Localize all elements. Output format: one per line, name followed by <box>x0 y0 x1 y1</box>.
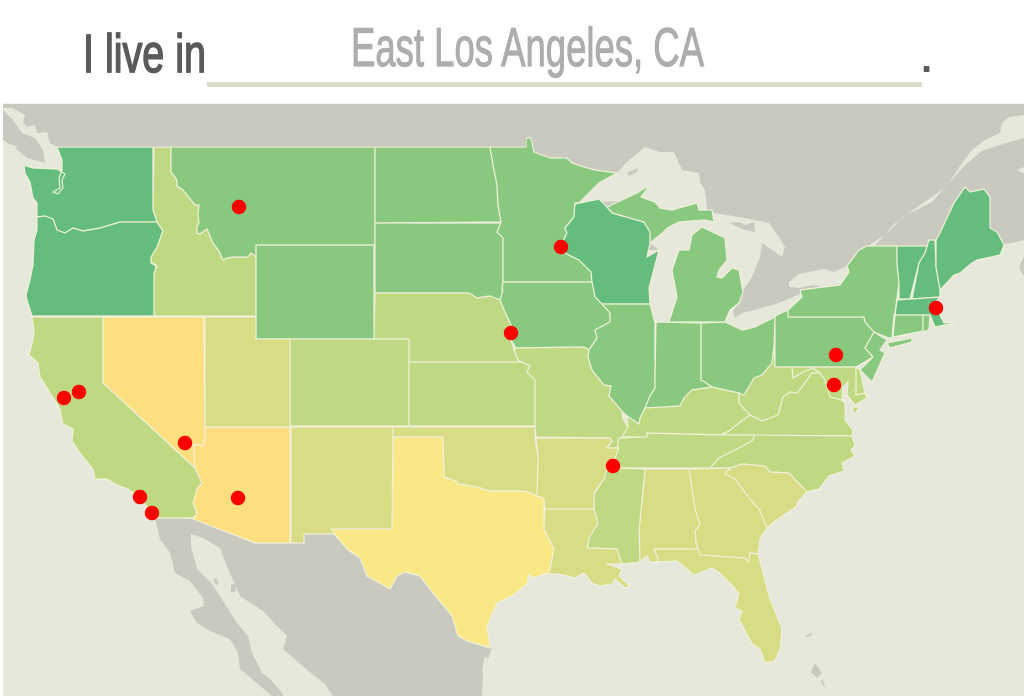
state: Minnesota <box>490 138 617 282</box>
state: Rhode Island <box>923 315 930 332</box>
state: Pennsylvania <box>775 310 874 367</box>
state: Virginia eastern shore <box>853 407 860 415</box>
state: West Virginia <box>739 347 820 421</box>
state: Vermont <box>897 246 927 299</box>
state: Wisconsin <box>560 199 659 304</box>
state: Massachusetts <box>895 297 955 327</box>
Gulf of St. Lawrence notch <box>1017 167 1024 174</box>
states choropleth <box>24 138 1004 663</box>
state: Maryland <box>792 367 867 405</box>
dot: Pennsylvania <box>829 348 843 362</box>
state: New York <box>788 246 899 338</box>
dot: Oakland <box>72 385 86 399</box>
state: Long Island <box>887 338 912 348</box>
state: Colorado <box>290 339 409 426</box>
Great Lakes: Superior, Michigan, Huron <box>579 147 785 325</box>
state: California <box>29 317 202 518</box>
state: South Carolina <box>725 464 807 528</box>
state: New Jersey <box>860 332 887 382</box>
state: Arizona <box>193 427 290 543</box>
state: Virginia <box>722 373 853 436</box>
state: Wyoming <box>256 245 374 339</box>
dot: Montana <box>232 200 246 214</box>
Bahamas <box>805 633 825 688</box>
state: Arkansas <box>536 438 619 509</box>
dot: Arizona <box>231 491 245 505</box>
markers: red location dots <box>57 200 943 520</box>
state: Illinois <box>588 304 655 424</box>
state: Indiana <box>645 322 712 408</box>
state: Utah <box>205 317 290 427</box>
state: Maine <box>936 187 1004 290</box>
dot: Massachusetts <box>929 301 943 315</box>
state: Tennessee <box>612 433 755 468</box>
dot: Nebraska <box>504 326 518 340</box>
state: Washington <box>24 147 157 233</box>
state: North Dakota <box>375 147 501 223</box>
dot: Maryland <box>827 378 841 392</box>
St. Lawrence River <box>860 115 1024 248</box>
state: Nevada <box>103 317 205 468</box>
Lake Erie <box>727 293 802 330</box>
state: Georgia <box>689 468 767 562</box>
state: Louisiana <box>544 509 630 588</box>
state: Oklahoma <box>393 427 538 496</box>
Baja islands <box>213 578 236 593</box>
state: Connecticut <box>893 315 923 337</box>
state: Oregon <box>26 216 163 316</box>
Lake Ontario <box>789 266 849 288</box>
state: Michigan upper peninsula <box>607 185 714 243</box>
dot: Las Vegas <box>178 436 192 450</box>
Nova Scotia <box>1019 256 1024 277</box>
state: Kansas <box>409 362 535 426</box>
land: Canada <box>3 104 1024 318</box>
state: Kentucky <box>622 387 750 437</box>
Isle Royale <box>627 168 638 176</box>
state: Michigan lower peninsula <box>669 227 743 322</box>
state: New Hampshire <box>912 240 940 299</box>
state: Missouri <box>514 347 628 448</box>
dot: Los Angeles <box>133 490 147 504</box>
state: Iowa <box>500 282 610 350</box>
state: Nebraska <box>374 293 520 362</box>
dot: Memphis <box>606 459 620 473</box>
dot: Minnesota <box>554 240 568 254</box>
land: Vancouver Island <box>3 110 45 163</box>
Gulf of California lagoon <box>482 657 488 672</box>
state: Alabama <box>639 469 700 562</box>
state: Florida <box>654 549 782 663</box>
text input value: East Los Angeles, CA: East Los Angeles, CA <box>351 16 704 78</box>
heading: period: . <box>921 37 932 81</box>
state: New Mexico <box>291 427 393 543</box>
top border cover <box>62 104 526 147</box>
input underline <box>207 82 922 87</box>
state: Montana <box>171 147 375 260</box>
state: Mississippi <box>587 468 645 564</box>
dot: San Diego coast <box>145 506 159 520</box>
state: Ohio <box>701 317 775 395</box>
state: South Dakota <box>375 223 503 300</box>
land: Mexico <box>155 518 492 696</box>
state: Idaho <box>151 147 256 316</box>
state: Texas <box>330 437 554 648</box>
Manitoulin Island <box>729 222 755 232</box>
dot: San Francisco <box>57 391 71 405</box>
heading: I live in: I live in <box>83 24 206 84</box>
state: North Carolina <box>710 435 855 492</box>
state: Delaware <box>856 367 865 395</box>
